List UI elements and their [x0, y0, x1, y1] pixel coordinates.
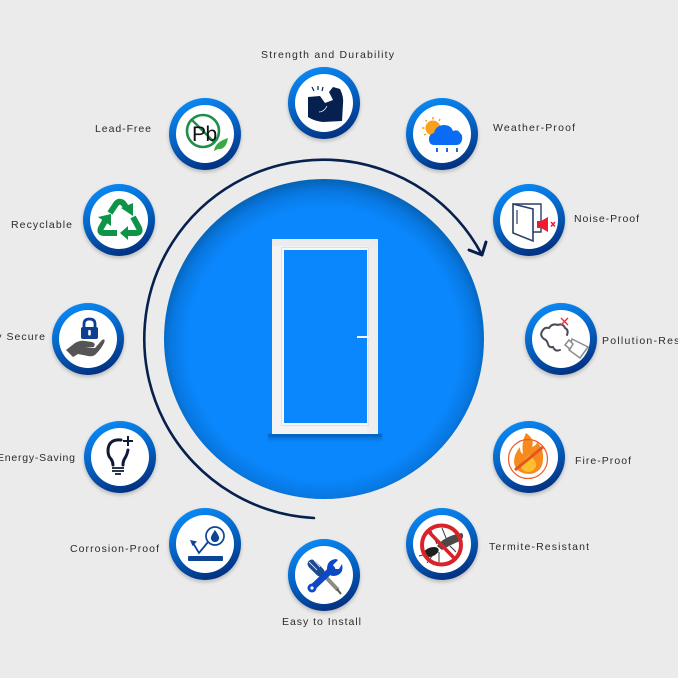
feature: Strength and Durability	[261, 49, 395, 142]
icon: screwdriver and wrench	[288, 539, 360, 614]
label: Weather-Proof	[493, 122, 575, 134]
feature: Corrosion-Proof	[70, 508, 242, 582]
icon: crossed Pb with leaf	[168, 98, 242, 172]
label: Recyclable	[11, 219, 72, 231]
label: Noise-Proof	[574, 213, 639, 225]
feature: Recyclable	[11, 184, 156, 258]
icon: light bulb with plus	[84, 421, 156, 496]
feature: Lead-Free	[95, 98, 242, 172]
icon: water drop on surface	[168, 508, 242, 582]
circular arrow	[144, 160, 486, 518]
feature: Highly Secure	[0, 303, 124, 378]
icon: door with muted speaker	[492, 184, 566, 258]
label: Easy to Install	[282, 616, 361, 628]
icon: padlock on hand	[52, 303, 124, 378]
feature: Pollution-Resistant	[524, 303, 678, 378]
icon: flexed arm	[288, 67, 360, 142]
icon: recycle arrows	[82, 184, 156, 258]
label: Termite-Resistant	[489, 541, 589, 553]
icon: crossed flame	[492, 421, 566, 496]
icon: exhaust smoke	[524, 303, 598, 378]
feature: Energy-Saving	[0, 421, 156, 496]
label: Corrosion-Proof	[70, 543, 159, 555]
feature: Easy to Install	[282, 539, 361, 628]
label: Strength and Durability	[261, 49, 395, 61]
icon: crossed Pb with leaf: Pb	[192, 123, 217, 146]
label: Fire-Proof	[575, 455, 631, 467]
feature: Fire-Proof	[492, 421, 631, 496]
icon: sun and rain cloud	[406, 98, 478, 172]
label: Lead-Free	[95, 123, 151, 135]
icon: crossed termite	[406, 508, 478, 582]
feature: Noise-Proof	[492, 184, 639, 258]
door illustration	[268, 239, 382, 444]
main blue circle	[164, 179, 484, 499]
feature: Weather-Proof	[406, 98, 575, 172]
feature: Termite-Resistant	[406, 508, 589, 582]
